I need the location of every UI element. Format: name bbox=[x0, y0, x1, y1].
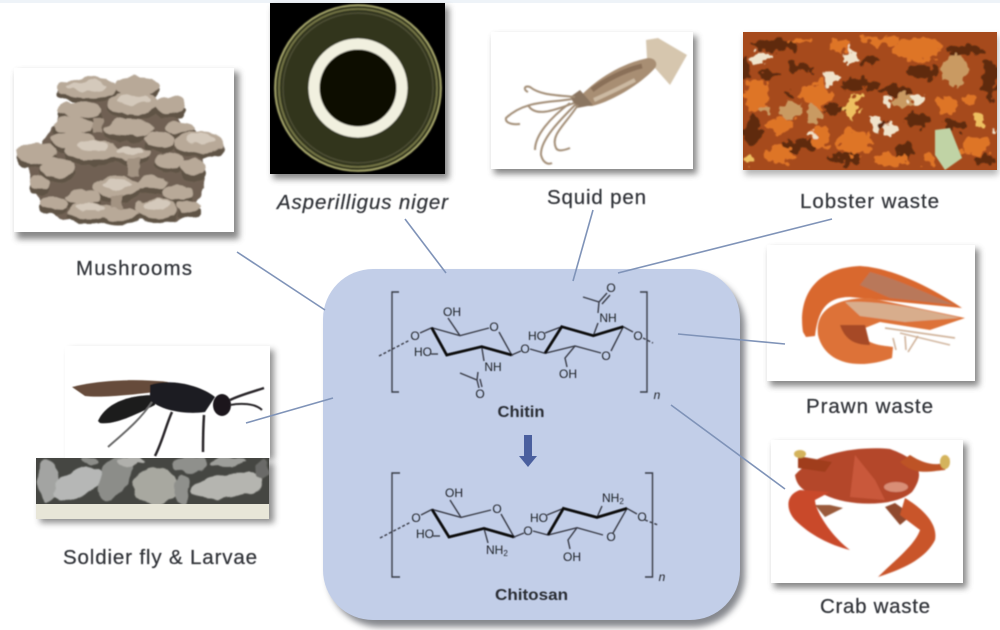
photo: Aspergillus niger plate bbox=[270, 3, 449, 179]
cream strip under larvae bbox=[36, 504, 269, 519]
structure: chitin: OH bbox=[559, 367, 577, 381]
label: Lobster waste: Lobster waste bbox=[800, 190, 939, 213]
structure: chitosan: 2 bbox=[503, 549, 508, 558]
structure: chitosan: n bbox=[659, 570, 666, 584]
connector: soldier fly bbox=[246, 398, 333, 423]
label: Mushrooms: Mushrooms bbox=[76, 257, 192, 280]
photo: crab bbox=[771, 440, 967, 588]
structure: chitosan: NH bbox=[486, 543, 503, 557]
structure: chitosan: O bbox=[606, 530, 616, 544]
label: Asperilligus niger: Asperilligus niger bbox=[275, 191, 449, 214]
photo: mushrooms bbox=[14, 68, 239, 239]
label: Chitosan: Chitosan bbox=[495, 587, 568, 604]
structure: chitin: O bbox=[606, 281, 616, 295]
photo: squid bbox=[491, 32, 697, 174]
photo: lobster waste bbox=[740, 32, 999, 175]
structure: chitosan: NH bbox=[602, 491, 619, 505]
connector: lobster waste bbox=[618, 219, 832, 273]
photo: prawns bbox=[767, 245, 979, 386]
label: Squid pen: Squid pen bbox=[547, 186, 646, 209]
structure: chitin: O bbox=[475, 387, 485, 401]
icon: soldier fly bbox=[72, 380, 264, 456]
larvae image bbox=[36, 458, 269, 504]
structure: chitosan: HO bbox=[416, 527, 434, 541]
label: Prawn waste: Prawn waste bbox=[806, 395, 933, 418]
panel: chemistry background bbox=[323, 269, 745, 627]
structure: chitin: O bbox=[633, 329, 643, 343]
structure: chitin: O bbox=[601, 349, 611, 363]
structure: chitosan: O bbox=[523, 524, 533, 538]
structure: chitosan bbox=[380, 473, 666, 584]
structure: chitosan: O bbox=[411, 511, 421, 525]
structure: chitosan: OH bbox=[445, 486, 463, 500]
connector: prawn waste bbox=[678, 334, 785, 344]
structure: chitin: OH bbox=[443, 305, 461, 319]
connector: squid pen bbox=[573, 210, 593, 281]
photo: soldier fly and larvae bbox=[36, 346, 274, 523]
arrow: chitin to chitosan bbox=[519, 435, 537, 467]
connector: crab waste bbox=[671, 405, 785, 489]
label: Chitin: Chitin bbox=[498, 404, 544, 421]
structure: chitosan: HO bbox=[530, 511, 548, 525]
structure: chitin: O bbox=[410, 329, 420, 343]
structure: chitin: NH bbox=[484, 360, 502, 374]
structure: chitin: O bbox=[489, 320, 499, 334]
structure: chitin: HO bbox=[528, 329, 546, 343]
connector: mushrooms bbox=[237, 252, 325, 310]
structure: chitosan: 2 bbox=[619, 497, 624, 506]
structure: chitin: HO bbox=[414, 345, 432, 359]
structure: chitosan: OH bbox=[563, 550, 581, 564]
structure: chitin: NH bbox=[599, 311, 617, 325]
connector: Aspergillus bbox=[405, 219, 446, 273]
structure: chitin: n bbox=[654, 388, 661, 402]
label: Soldier fly and Larvae: Soldier fly & Larvae bbox=[63, 546, 257, 569]
structure: chitosan: O bbox=[637, 510, 647, 524]
structure: chitosan: O bbox=[492, 502, 502, 516]
structure: chitin: O bbox=[520, 342, 530, 356]
structure: chitin bbox=[379, 281, 661, 402]
label: Crab waste: Crab waste bbox=[820, 595, 930, 618]
